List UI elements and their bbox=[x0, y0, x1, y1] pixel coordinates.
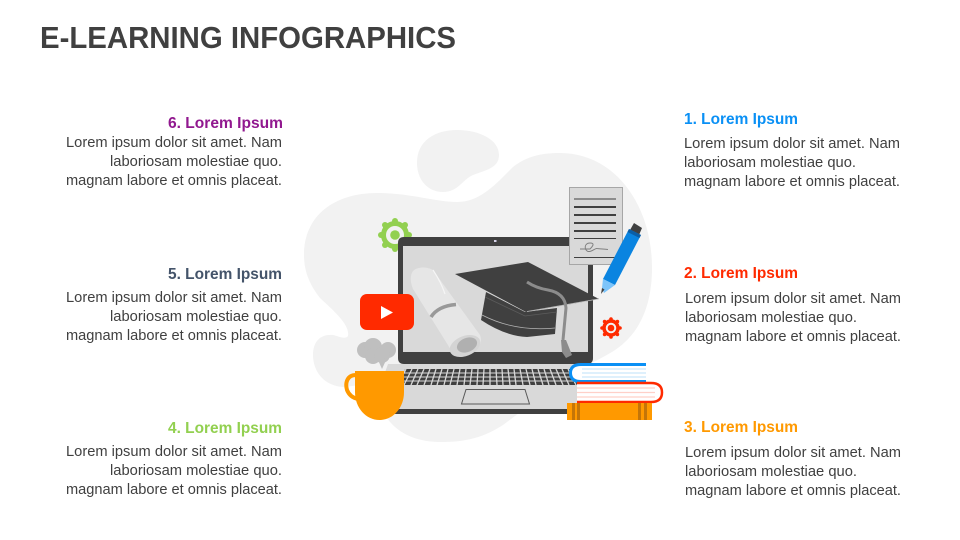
text block 3: laboriosam molestiae quo. bbox=[685, 464, 857, 480]
text block 1 bbox=[684, 111, 900, 190]
text block 2: magnam labore et omnis placeat. bbox=[685, 329, 901, 345]
document bbox=[570, 188, 622, 264]
text block 1: magnam labore et omnis placeat. bbox=[684, 174, 900, 190]
text block 1: 1. Lorem Ipsum bbox=[684, 111, 798, 128]
text block 5: laboriosam molestiae quo. bbox=[110, 309, 282, 325]
text block 5: 5. Lorem Ipsum bbox=[168, 266, 282, 283]
blue book bbox=[570, 364, 646, 382]
orange book bbox=[567, 403, 652, 420]
laptop base bbox=[372, 364, 606, 414]
text block 2: Lorem ipsum dolor sit amet. Nam bbox=[685, 291, 901, 307]
coffee cup bbox=[346, 371, 404, 420]
text block 1: laboriosam molestiae quo. bbox=[684, 155, 856, 171]
text block 3 bbox=[684, 419, 901, 499]
text block 3: 3. Lorem Ipsum bbox=[684, 419, 798, 436]
icon: video play button bbox=[360, 294, 414, 330]
diploma scroll bbox=[411, 268, 484, 361]
text block 2: 2. Lorem Ipsum bbox=[684, 265, 798, 282]
text block 1: Lorem ipsum dolor sit amet. Nam bbox=[684, 136, 900, 152]
text block 2: laboriosam molestiae quo. bbox=[685, 310, 857, 326]
text block 5: magnam labore et omnis placeat. bbox=[66, 328, 282, 344]
red book bbox=[577, 383, 662, 402]
text block 6: laboriosam molestiae quo. bbox=[110, 154, 282, 170]
text block 6: magnam labore et omnis placeat. bbox=[66, 173, 282, 189]
text block 6: Lorem ipsum dolor sit amet. Nam bbox=[66, 135, 282, 151]
text block 4: Lorem ipsum dolor sit amet. Nam bbox=[66, 444, 282, 460]
text block 3: magnam labore et omnis placeat. bbox=[685, 483, 901, 499]
laptop bbox=[372, 237, 606, 414]
books bbox=[567, 364, 662, 420]
background blob bbox=[304, 130, 652, 442]
text block 4: magnam labore et omnis placeat. bbox=[66, 482, 282, 498]
text block 6: 6. Lorem Ipsum bbox=[168, 115, 283, 132]
text block 4: laboriosam molestiae quo. bbox=[110, 463, 282, 479]
trackpad bbox=[462, 390, 530, 404]
text block 4: 4. Lorem Ipsum bbox=[168, 420, 282, 437]
text block 5 bbox=[66, 266, 282, 344]
graduation cap bbox=[455, 262, 599, 358]
steam cloud bbox=[357, 338, 396, 369]
keyboard bbox=[398, 369, 579, 385]
text block 3: Lorem ipsum dolor sit amet. Nam bbox=[685, 445, 901, 461]
screen bbox=[398, 237, 593, 364]
title: E-LEARNING INFOGRAPHICS bbox=[40, 21, 456, 55]
text block 2 bbox=[684, 265, 901, 345]
pencil bbox=[601, 223, 642, 294]
text block 6 bbox=[66, 115, 283, 189]
icon: green gear bbox=[378, 218, 412, 252]
icon: red gear bbox=[600, 317, 622, 339]
text block 5: Lorem ipsum dolor sit amet. Nam bbox=[66, 290, 282, 306]
text block 4 bbox=[66, 420, 282, 498]
